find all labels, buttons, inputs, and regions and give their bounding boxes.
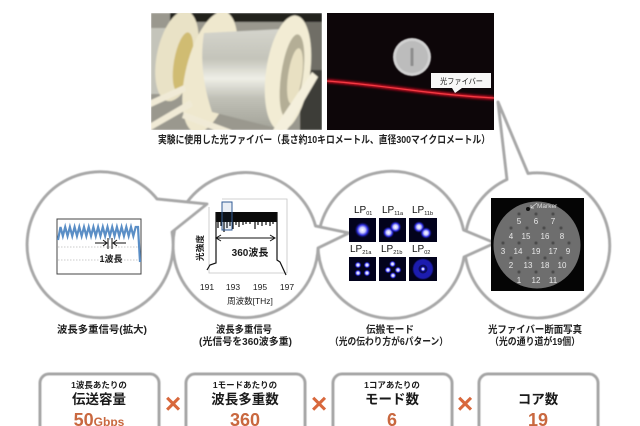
x axis ticks: 195 [253,282,267,292]
photo caption: 実験に使用した光ファイバー（長さ約10キロメートル、直径300マイクロメートル） [158,133,490,146]
card: capacity per wavelength: 1波長あたりの [71,380,127,390]
core numbers: 2 [509,261,514,270]
label: one wavelength: 1波長 [99,253,123,264]
card: number of cores: コア数 [518,392,559,407]
photo: fiber spools [151,13,322,130]
core numbers: 5 [517,217,522,226]
fiber label callout [431,73,491,93]
fiber label callout: 光ファイバー [440,76,483,86]
core numbers: 4 [509,232,514,241]
core numbers: 18 [541,261,550,270]
caption: enlarged signal: 波長多重信号(拡大) [57,323,147,336]
mode LP11a: 11a [394,211,404,217]
core numbers: 16 [541,232,550,241]
fiber cross section photo [491,198,584,291]
multiply sign 1: × [165,388,181,419]
circle: fiber cross section with tail to photo [465,102,610,318]
spectrum band [216,212,277,222]
core numbers: 8 [560,232,565,241]
multiply sign 3: × [457,388,473,419]
core numbers: 1 [517,276,522,285]
mode patterns [349,205,437,281]
caption: cross section: （光の通り道が19個） [490,335,580,348]
mode LP21b [379,244,406,281]
core numbers: 13 [524,261,533,270]
mode LP21a [349,244,376,281]
caption: cross section: 光ファイバー断面写真 [488,323,582,336]
card: capacity per wavelength: 伝送容量 [72,391,126,407]
caption: propagation modes: 伝搬モード [366,323,414,336]
mode LP01: LP [354,205,366,216]
mode LP02: 02 [424,250,430,256]
core numbers: 3 [501,247,506,256]
mode LP21a: LP [350,244,362,255]
core numbers: 9 [566,247,571,256]
core numbers: 7 [551,217,556,226]
chart: enlarged wavelength signal [57,219,141,274]
mode LP02: LP [412,244,424,255]
y axis label: 光強度 [195,235,205,261]
wavelength spacing arrows [95,238,126,249]
signal waveform [58,227,140,262]
core numbers: 6 [534,217,539,226]
card: wavelengths per mode: 1モードあたりの [213,380,277,390]
x axis ticks: 197 [280,282,294,292]
core numbers: 11 [549,276,558,285]
red fiber line [327,81,494,98]
multiply sign 2: × [311,388,327,419]
core numbers: 19 [532,247,541,256]
core numbers [501,217,571,285]
mode LP02 [409,244,437,281]
core numbers: 14 [514,247,523,256]
card: capacity per wavelength [40,374,159,426]
mode LP21b: LP [381,244,393,255]
core numbers: 17 [549,247,558,256]
bandwidth arrow [216,235,275,241]
circle: propagation modes with tail to cross section [318,171,495,318]
zoom selection box [222,202,232,230]
mode LP11b: LP [412,205,424,216]
card: modes per core: 1コアあたりの [364,380,420,390]
x axis ticks [200,282,294,292]
card: wavelengths per mode [186,374,305,426]
x axis ticks: 191 [200,282,214,292]
core numbers: 10 [558,261,567,270]
mode LP11b: 11b [424,211,433,217]
circle: enlarged signal with tail to spectrum chart [27,172,207,318]
marker: Marker [537,203,558,210]
caption: wavelength multiplex: (光信号を360波多重) [199,335,292,348]
x axis label: 周波数[THz] [227,296,273,306]
label: 360 wavelengths: 360波長 [232,246,268,259]
card: modes per core: モード数 [365,392,419,407]
coin [393,38,431,76]
x axis ticks: 193 [226,282,240,292]
mode LP11a [379,205,406,242]
mode LP21b: 21b [393,250,402,256]
circle: wavelength multiplex with tail to mode box [173,173,349,318]
caption: wavelength multiplex [199,323,292,348]
caption: propagation modes: （光の伝わり方が6パターン） [330,335,448,348]
mode LP11a: LP [382,205,394,216]
circles with callout tails [27,102,610,318]
mode LP21a: 21a [362,250,372,256]
core dots [502,212,570,274]
card: modes per core [333,374,452,426]
caption: wavelength multiplex: 波長多重信号 [216,323,272,336]
photo: fiber with coin [327,13,494,130]
caption: cross section [488,323,582,348]
chart: 360 wavelength spectrum [195,199,294,306]
mode LP01 [349,205,376,242]
caption: propagation modes [330,323,448,348]
core numbers: 15 [522,232,531,241]
core numbers: 12 [532,276,541,285]
card: wavelengths per mode: 波長多重数 [211,391,279,407]
spectrum outline [207,212,286,275]
mode LP11b [409,205,437,242]
mode LP01: 01 [366,211,372,217]
card: number of cores [479,374,598,426]
